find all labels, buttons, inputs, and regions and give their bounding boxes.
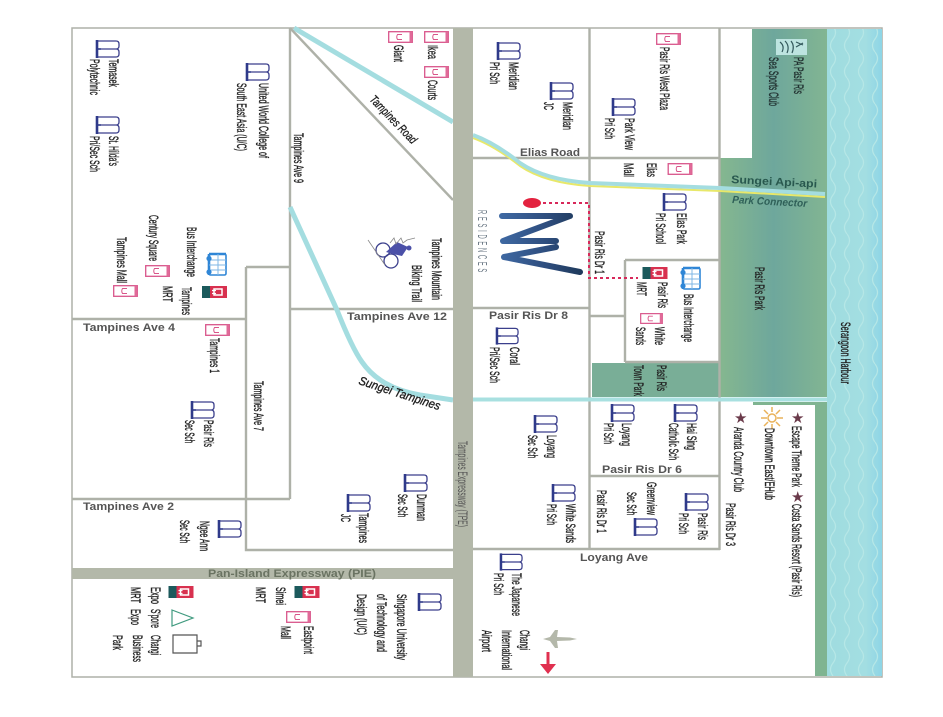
St. Hilda's [87,116,122,172]
label: Park Connector: Park Connector [732,194,808,210]
river: Sungei Tampines [290,207,453,400]
Temasek Polytechnic: Polytechnic [87,59,103,95]
Courts [425,67,448,100]
Loyang Sec Sch [525,415,560,458]
Pasir Ris MRT: MRT [634,282,650,296]
Eastpoint Mall: Mall [278,626,294,639]
callout: site dotted line [543,203,638,278]
text: Pri/Sec Sch [87,136,103,172]
label: Pan-Island Expressway: Pan-Island Expressway (PIE) [208,568,376,580]
Simei MRT [253,586,320,605]
text: Pasir Ris Park [752,267,768,310]
United World College [234,63,272,158]
text: Tampines Expressway (TPE) [455,441,471,527]
Greenview Sec Sch: Sec Sch [624,492,640,515]
Pasir Ris Sec Sch: Sec Sch [182,420,198,443]
Expo MRT [128,586,194,604]
Park View Pri Sch [602,98,638,150]
Tampines JC [338,494,372,543]
White Sands mall [633,314,668,345]
text: S'pore [148,609,164,628]
road labels: Pasir Ris Dr 6 [602,464,682,476]
text: Pasir Ris [695,513,711,540]
Giant [389,32,412,62]
Changi International Airport: International [499,630,515,670]
Tampines Mountain Biking Trail: Tampines Mountain [429,238,445,300]
Aranda Country Club [731,410,747,492]
Elias Mall [621,163,692,177]
text: Bus Interchange [184,227,200,277]
Tampines Mountain Biking Trail [368,238,445,302]
road labels: Tampines Ave 4 [83,322,176,334]
text: The Japanese [509,573,525,616]
Costa Sands Resort [789,489,805,597]
Escape Theme Park: ★ [791,410,804,427]
Coral Pri/Sec Sch: Coral [507,347,523,365]
Meridian Pri Sch [487,42,522,90]
road labels: Pasir Ris Dr 3 [723,503,739,546]
label: Serangoon Harbour: Serangoon Harbour [838,322,854,384]
Temasek Polytechnic [87,40,122,95]
Loyang Sec Sch: Loyang [544,435,560,458]
Hai Sing Catholic Sch [666,404,700,460]
road labels: Tampines Ave 2 [83,501,174,513]
Century Square: Century Square [146,215,162,261]
White Sands mall: White [652,327,668,345]
text: Tampines [179,287,195,315]
Downtown East: Downtown East/EHub [762,428,778,500]
Loyang Pri Sch: Pri Sch [601,423,617,444]
text: Business [130,635,146,662]
Dunman Sec Sch: Sec Sch [395,494,411,517]
text: Sec Sch [525,435,541,458]
text: Pri/Sec Sch [487,347,503,383]
Dunman Sec Sch [395,474,430,521]
Giant: Giant [391,45,407,62]
Singapore University of Technology and Design: Design (U/C) [354,594,370,635]
White Sands Pri Sch: Pri Sch [544,504,560,525]
Coral Pri/Sec Sch [487,327,523,383]
road network [72,28,720,550]
road labels: Tampines Road [367,92,420,147]
Pasir Ris MRT [634,267,671,308]
arrow: to airport [540,652,556,674]
road labels: Elias Road [520,147,580,159]
Downtown East [761,407,783,500]
text: Catholic Sch [666,423,682,460]
The Japanese Pri Sch [491,553,525,616]
Tampines JC: JC [338,514,354,522]
Ikea [425,32,448,59]
panel: Pasir Ris Town Park green area [592,363,719,397]
Ngee Ann Sec Sch [177,520,241,551]
Pan-Island Expressway band [72,568,453,579]
icon: sea sports [776,39,807,55]
Escape Theme Park [789,410,805,487]
The Japanese Pri Sch: Pri Sch [491,573,507,595]
Bus Interchange Tampines [184,227,226,277]
Changi International Airport [479,630,577,670]
Meridian Pri Sch: Pri Sch [487,62,503,84]
Dunman Sec Sch: Dunman [414,494,430,521]
road labels [83,92,739,564]
label: Pasir Ris Town Park [631,365,670,396]
icon: sun [761,407,783,429]
Tampines Mountain Biking Trail: Biking Trail [409,265,425,302]
road labels: Pasir Ris Dr 1 [592,231,608,274]
text: Pri School [653,213,669,244]
Expo MRT: MRT [128,587,144,603]
canal: Tampines north [294,28,453,122]
Aranda Country Club: ★ [734,410,747,427]
panel: Serangoon Harbour water [827,29,882,676]
Greenview Sec Sch [624,482,660,536]
Loyang Pri Sch [601,404,635,446]
icon: plane [543,630,577,648]
Expo MRT: Expo [148,587,164,604]
road: Tampines Road diagonal [290,28,453,200]
S'pore Expo: Expo [128,609,144,625]
Singapore University of Technology and Design [354,593,441,660]
text: Costa Sands Resort (Pasir Ris) [789,504,805,597]
text: Sea Sports Club [766,57,782,106]
road labels: Tampines Ave 12 [347,311,447,323]
road labels: Pasir Ris Dr 8 [489,310,568,322]
Changi International Airport: Changi [517,630,533,650]
logo: iNV Residences [475,198,580,275]
text: Escape Theme Park [789,426,805,487]
Meridian JC [541,82,576,130]
text: Eastpoint [301,626,317,654]
Pasir Ris West Plaza [657,34,680,110]
panel: Pasir Ris Park green area [720,29,827,397]
text: Pasir Ris West Plaza [657,47,673,110]
Singapore University of Technology and Design: of Technology and [374,594,390,652]
Greenview Sec Sch: Greenview [644,482,660,515]
road labels: Loyang Ave [580,552,648,564]
Tampines Mall: Tampines Mall [114,237,130,283]
Ikea: Ikea [425,45,441,59]
Changi Business Park [110,635,201,662]
text: Bus Interchange [681,294,697,342]
Park View Pri Sch: Pri Sch [602,118,618,139]
St. Hilda's: St. Hilda's [106,136,122,166]
text: Courts [425,80,441,100]
Hai Sing Catholic Sch: Hai Sing [684,423,700,450]
S'pore Expo [128,609,193,628]
Park View Pri Sch: Park View [622,118,638,150]
river: Sungei Api-api [473,135,825,194]
Tampines Mall [114,237,137,296]
road labels: Pasir Ris Dr 1 [594,490,610,533]
Meridian JC: JC [541,102,557,110]
Costa Sands Resort: ★ [791,489,804,506]
road labels: Sungei Tampines [357,374,442,413]
Elias Mall: Mall [621,163,637,177]
text: Pasir Ris [201,420,217,447]
Loyang Pri Sch: Loyang [619,423,635,446]
Tampines 1 [206,325,229,373]
Pasir Ris Sec Sch [182,401,217,447]
text: RESIDENCES [475,210,490,275]
PA Pasir Ris Sea Sports Club: PA Pasir Ris [791,57,807,94]
map frame [72,28,882,677]
text: White Sands [563,504,579,543]
Eastpoint Mall [278,612,317,654]
White Sands Pri Sch [544,484,579,543]
Bus Interchange Pasir Ris [680,268,700,342]
United World College: United World College of [256,83,272,158]
label: Sungei Api-api: Sungei Api-api [731,174,817,190]
Tampines MRT [160,286,227,315]
United World College: South East Asia (U/C) [234,83,250,151]
Simei MRT: MRT [253,587,269,603]
Ngee Ann Sec Sch: Sec Sch [177,520,193,543]
Tampines JC: Tampines [356,513,372,543]
Changi International Airport: Airport [479,630,495,652]
Century Square [146,215,169,276]
road labels: Tampines Ave 9 [291,133,307,183]
text: Elias Park [674,213,690,244]
PA Pasir Ris Sea Sports Club [766,39,807,106]
Pasir Ris Pri Sch: Pri Sch [676,513,692,534]
Changi Business Park: Changi [148,635,164,655]
text: Pasir Ris [655,282,671,308]
road labels: Tampines Ave 7 [251,381,267,431]
text: Elias [644,163,660,177]
park connector: yellow path [473,138,825,197]
Pasir Ris Pri Sch [676,493,711,540]
text: Tampines 1 [207,338,223,373]
text: Aranda Country Club [731,427,747,492]
Temasek Polytechnic: Temasek [106,59,122,87]
Tampines MRT: MRT [160,286,176,302]
Meridian Pri Sch: Meridian [506,62,522,90]
Elias Park Pri School [653,193,690,244]
Changi Business Park: Park [110,635,126,651]
Simei MRT: Simei [273,587,289,605]
text: Sands [633,327,649,345]
label: Pasir Ris Town Park: Pasir Ris [654,365,670,391]
text: Ngee Ann [197,521,213,551]
Meridian JC: Meridian [560,102,576,130]
panel: southern green strip [753,402,827,676]
Tampines Expressway band [453,28,473,677]
text: Town Park [631,365,647,396]
canal south of Pasir Ris Park [473,398,827,402]
icon: cyclist [368,238,415,268]
